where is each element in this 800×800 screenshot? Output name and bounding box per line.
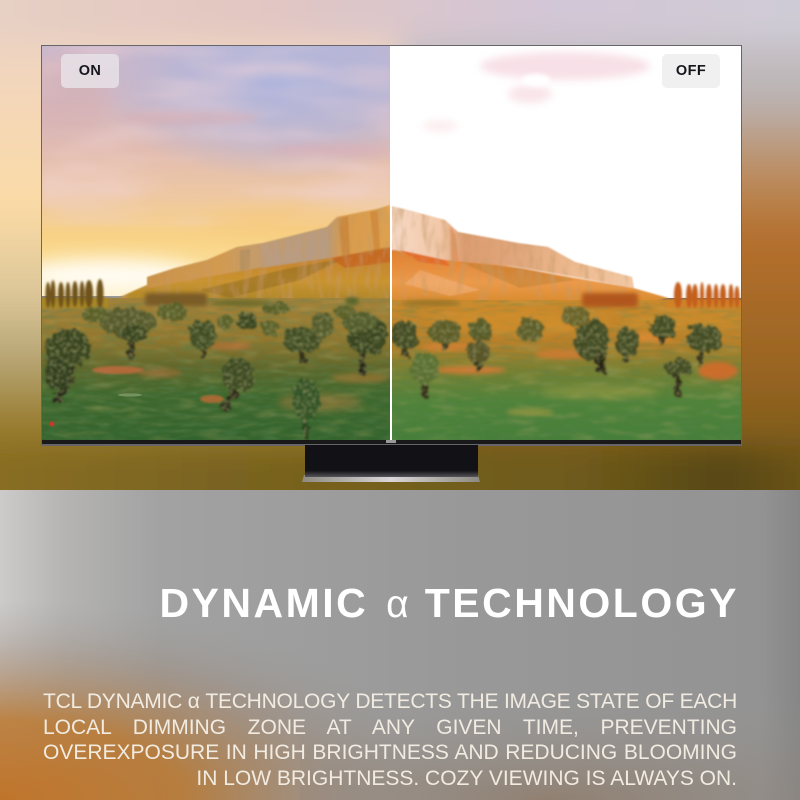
label: on: ON (79, 63, 101, 79)
orchard trees: off (393, 308, 720, 396)
ground: off (391, 300, 741, 440)
label: off (662, 54, 720, 88)
label: off: OFF (676, 63, 706, 79)
tree (651, 318, 675, 343)
body text: LOCAL DIMMING ZONE AT ANY GIVEN TIME, PREVENTING (43, 716, 737, 739)
tree (102, 310, 154, 359)
tree (563, 308, 608, 372)
tree (430, 322, 460, 350)
tree (471, 321, 489, 346)
tree (219, 314, 255, 328)
orchard trees: on (46, 303, 386, 438)
stand body (305, 445, 478, 477)
tree (344, 314, 386, 374)
divider line (390, 46, 392, 440)
tree (667, 359, 689, 394)
poplar row: on (42, 279, 108, 309)
screen half: dimming off (391, 46, 741, 440)
poplar row: off (665, 282, 741, 308)
tree (518, 321, 542, 339)
sky: on (42, 46, 390, 298)
mountain: off (391, 206, 668, 306)
ground: on (42, 298, 391, 440)
body text: TCL DYNAMIC α TECHNOLOGY DETECTS THE IMAGE STATE OF EACH (43, 690, 737, 713)
body text: IN LOW BRIGHTNESS. COZY VIEWING IS ALWAYS ON. (196, 767, 737, 790)
tree (688, 326, 720, 365)
tree (191, 322, 215, 356)
label: on (61, 54, 119, 88)
tree (393, 323, 417, 355)
tree (294, 381, 318, 438)
distant tree line: off (400, 293, 638, 307)
sky: off (391, 46, 741, 298)
upper backdrop gradient (0, 0, 800, 490)
tree (412, 354, 438, 396)
tree (617, 330, 637, 360)
mountain: on (120, 205, 391, 305)
body text (43, 690, 737, 790)
stand base (302, 475, 480, 482)
television (41, 45, 742, 482)
tree (468, 343, 488, 370)
tree (222, 360, 252, 409)
bushes (84, 303, 353, 334)
distant tree line: on (145, 293, 359, 306)
screen half: dimming on (42, 46, 390, 440)
tree (285, 313, 331, 362)
tv frame (41, 45, 742, 446)
bottom bezel (42, 440, 741, 444)
lower backdrop gradient (0, 490, 800, 800)
body text: OVEREXPOSURE IN HIGH BRIGHTNESS AND REDUCING BLOOMING (43, 741, 737, 764)
tree (46, 330, 88, 403)
heading: DYNAMIC α TECHNOLOGY (159, 580, 739, 626)
logo mark (386, 440, 396, 443)
